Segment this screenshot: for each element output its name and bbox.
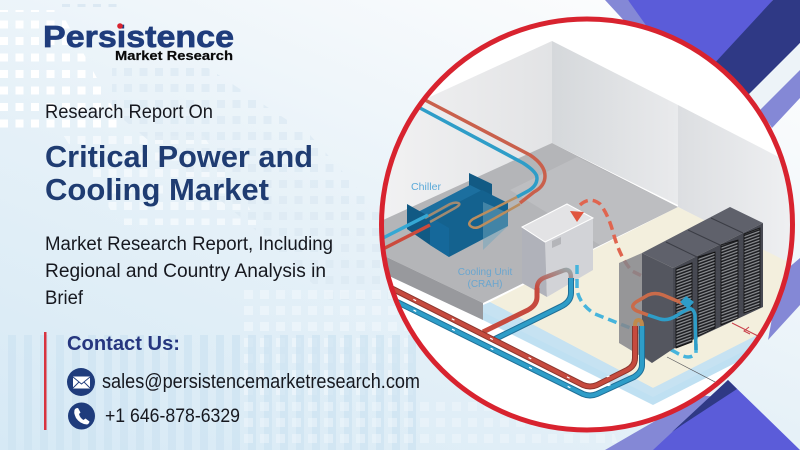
contact heading: Contact Us: bbox=[67, 333, 180, 355]
arrow: warm air into cooling unit bbox=[570, 211, 584, 222]
description text: Regional and Country Analysis in bbox=[45, 261, 326, 282]
leader lines bbox=[667, 323, 760, 383]
icon: envelope bbox=[67, 368, 95, 396]
icon: phone bbox=[68, 402, 95, 430]
phone text: +1 646-878-6329 bbox=[105, 406, 240, 427]
label: cooling unit bbox=[458, 267, 512, 290]
description text: Market Research Report, Including bbox=[45, 234, 333, 255]
chiller bbox=[407, 173, 508, 257]
label: cooling unit: Cooling Unit bbox=[458, 267, 512, 278]
label: cooling unit: (CRAH) bbox=[468, 279, 502, 290]
label: chiller: Chiller bbox=[411, 182, 442, 193]
logo: Market Research bbox=[115, 49, 233, 63]
circle border bbox=[382, 19, 792, 430]
floor coolant pipes bbox=[375, 270, 642, 396]
rack cooling loop bbox=[633, 294, 696, 350]
description text: Brief bbox=[45, 288, 84, 309]
server racks bbox=[619, 207, 763, 363]
decorative corner shapes: bottom right bbox=[605, 258, 800, 450]
decorative corner shapes: top right bbox=[605, 0, 800, 128]
description text bbox=[45, 234, 333, 309]
contact divider bar bbox=[44, 332, 46, 430]
logo: Persistence bbox=[43, 19, 234, 54]
title bbox=[45, 139, 313, 207]
cooling unit cabinet bbox=[522, 204, 593, 297]
circular illustration: data centre cooling bbox=[372, 19, 800, 430]
subtitle: research report on: Research Report On bbox=[45, 102, 213, 123]
title: Cooling Market bbox=[45, 172, 269, 207]
upper pipes to chiller bbox=[383, 100, 545, 249]
email text: sales@persistencemarketresearch.com bbox=[102, 371, 420, 393]
title: Critical Power and bbox=[45, 139, 313, 174]
dashed airflow bbox=[577, 200, 696, 357]
room walls and floor bbox=[372, 41, 800, 405]
